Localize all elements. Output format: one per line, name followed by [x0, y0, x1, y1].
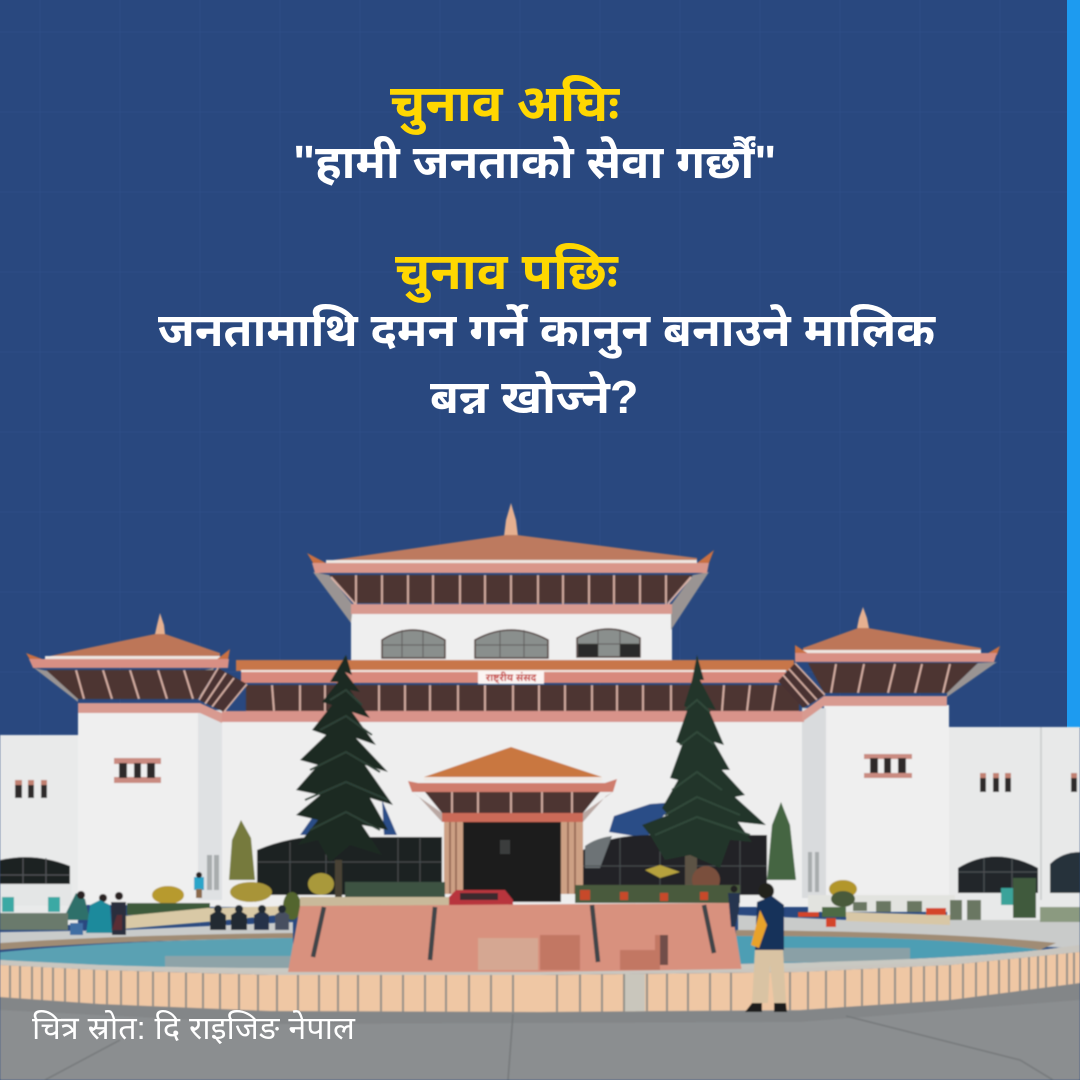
middle windows: [246, 685, 799, 711]
blue cut-out patches in wall: [300, 800, 676, 838]
left wing wall: [0, 735, 78, 925]
entrance pillars: [444, 822, 583, 894]
entrance porch windows: [425, 792, 600, 813]
parliament name sign: राष्ट्रीय संसद: [486, 672, 537, 684]
right pool: [736, 930, 1080, 972]
photo: parliament building and fountain: [0, 502, 1080, 1080]
small windows right tower: [864, 754, 912, 778]
main eave band: [312, 563, 709, 573]
small windows right wing: [980, 773, 1077, 792]
left tower eave band: [29, 659, 229, 668]
arched windows upper: [382, 629, 640, 658]
blue right edge bar: [1067, 0, 1080, 728]
entrance porch eave: [408, 779, 617, 792]
parliament name sign: [478, 671, 544, 684]
left tower horns: [26, 649, 230, 660]
left cypress shrub: [229, 820, 255, 880]
fountain platform: [288, 903, 742, 972]
right corner soffit: [778, 663, 825, 708]
right wing wall: [947, 727, 1080, 922]
entrance doorway: [461, 822, 561, 902]
platform tile shading: [540, 935, 667, 970]
main window dividers: [331, 575, 691, 604]
text: after election line one: जनतामाथि दमन गर्ने कानुन बनाउने मालिक: [158, 304, 935, 356]
entrance porch roof: [424, 747, 602, 777]
middle roof: [236, 660, 794, 671]
right tower lower band: [802, 696, 947, 722]
pool rim top: [0, 945, 1080, 975]
main roof horns: [307, 550, 714, 563]
left wing arch: [0, 857, 70, 885]
right soffit and windows: [808, 663, 978, 693]
platform dark stripes: [313, 905, 714, 962]
man in background: [728, 886, 740, 927]
text: after election line two: बन्न खोज्ने?: [430, 371, 638, 423]
left pool: [0, 933, 293, 975]
seated people: [210, 905, 289, 930]
plants and planters right: [575, 865, 1080, 927]
ground pavement: [0, 983, 1080, 1080]
heading: after election: चुनाव पछिः: [395, 243, 618, 300]
main roof spire: [504, 503, 518, 536]
middle band: [241, 672, 786, 683]
right cypress shrub: [767, 802, 796, 880]
tile grout: [8, 952, 1076, 1013]
person in blue at wall: [194, 872, 204, 898]
right tree: [642, 655, 766, 900]
plants and planters left: [124, 873, 450, 929]
right tower roof: [803, 628, 981, 652]
left tower dividers: [76, 670, 193, 699]
main roof white trim: [326, 560, 697, 563]
left soffit and windows: [34, 668, 214, 702]
small windows left tower: [114, 758, 161, 783]
upper wall: [351, 612, 672, 662]
right wing arches: [958, 852, 1080, 893]
main roof windows: [329, 575, 693, 603]
small windows left wing: [15, 780, 47, 798]
upper plaza: [0, 915, 1080, 948]
left tree: [296, 655, 393, 903]
middle lower band: [222, 711, 804, 722]
right tower horns: [795, 645, 1000, 655]
left tower spire: [155, 613, 165, 634]
group of people left: [0, 891, 126, 935]
ground floor arcade right: [583, 835, 767, 895]
tiled fountain wall: [0, 952, 1080, 1012]
main wall: [78, 705, 949, 907]
left tower roof: [45, 634, 220, 657]
right tower spire: [857, 607, 869, 628]
middle dividers: [272, 685, 776, 711]
left tower lower band: [78, 703, 222, 723]
heading: before election: चुनाव अघिः: [390, 75, 619, 132]
quote: we will serve the people: "हामी जनताको सेवा गर्छौं": [293, 136, 776, 188]
main soffit: [313, 572, 709, 630]
red car: [449, 890, 513, 905]
entrance beam: [442, 813, 583, 822]
right tower dividers: [831, 664, 950, 693]
man in jacket: [745, 883, 787, 1012]
left corner soffit: [199, 668, 247, 712]
entrance porch soffit: [412, 792, 613, 822]
main lower band: [351, 604, 672, 614]
ground floor arcade left: [257, 836, 442, 895]
right tower eave band: [795, 653, 997, 662]
main roof: [326, 535, 697, 561]
image credit: चित्र स्रोत: दि राइजिङ नेपाल: [32, 1010, 355, 1046]
